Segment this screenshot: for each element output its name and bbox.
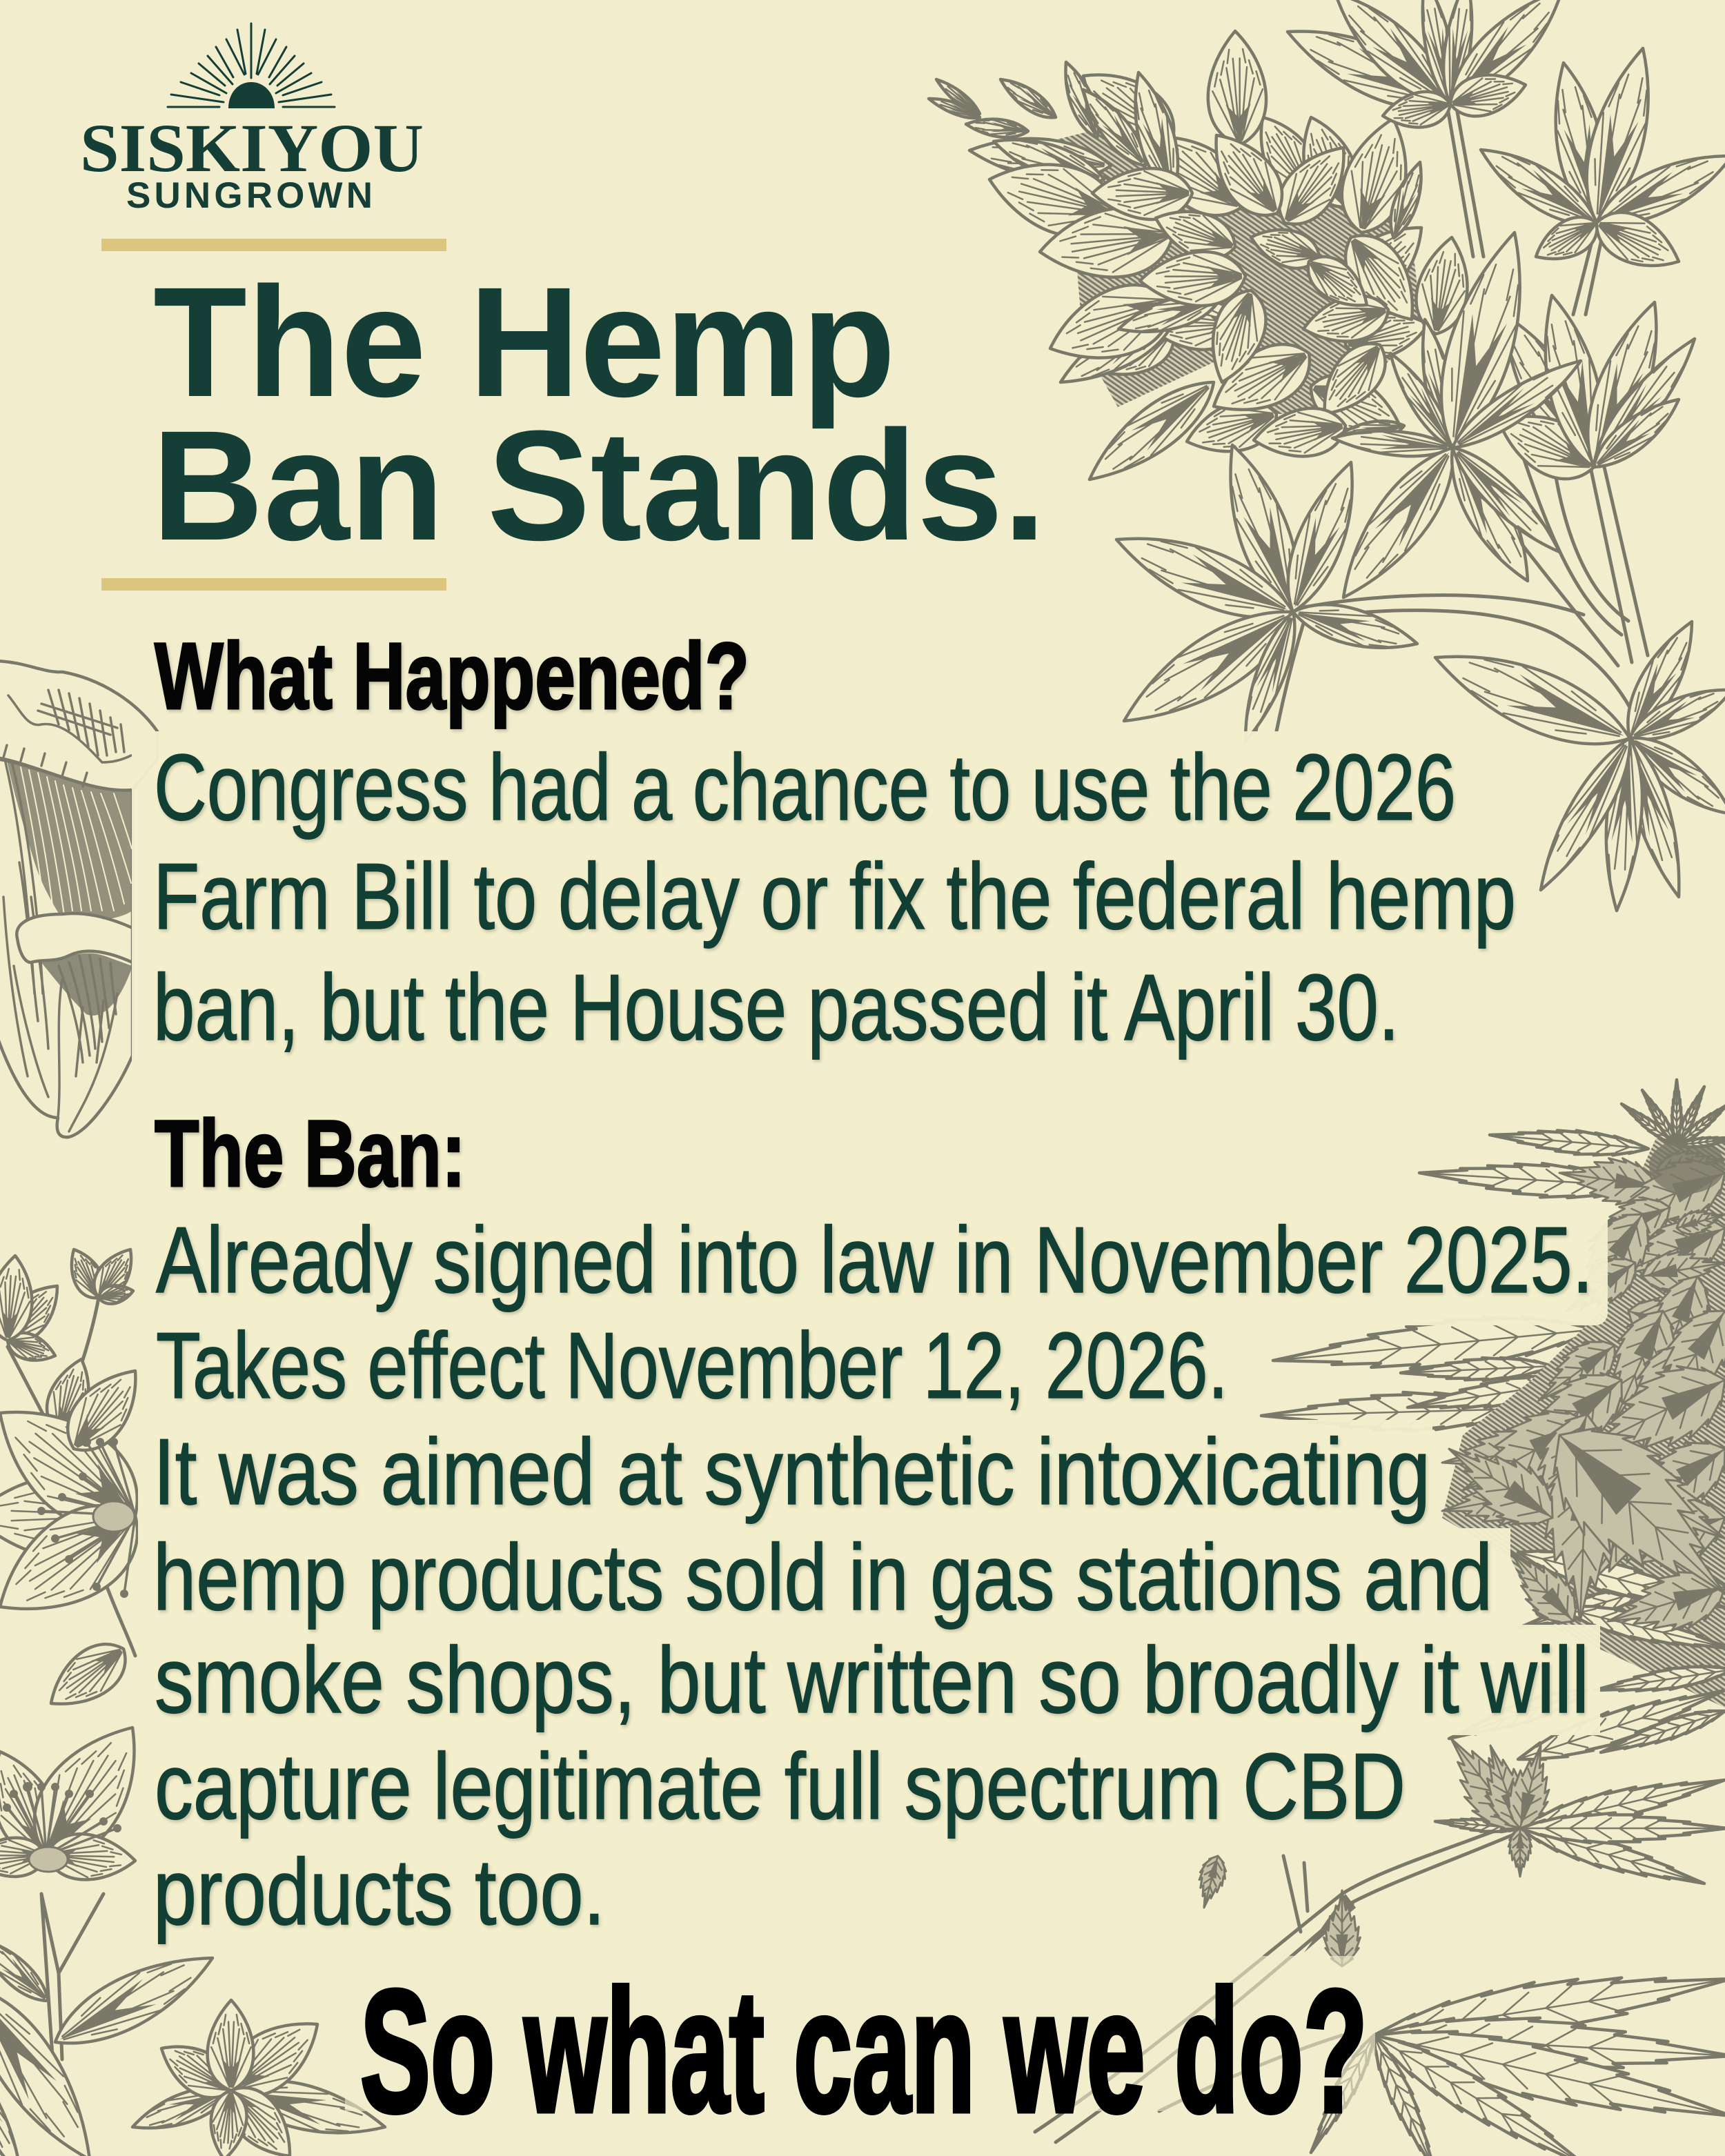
gold rule top (101, 239, 446, 251)
paragraph: what happened: ban, but the House passed it April 30. (153, 955, 1399, 1060)
large flower one (0, 1355, 161, 1642)
mid leaf whorl (1342, 1722, 1725, 1904)
paragraph: the ban (153, 1207, 1593, 1944)
title: Ban Stands. (152, 399, 1046, 573)
text background patches covering the illustrations (132, 731, 1608, 1956)
section: the ban (153, 1101, 1593, 1944)
hemp bud tone backing (1442, 1138, 1725, 1711)
paragraph: the ban: Takes effect November 12, 2026. (156, 1313, 1228, 1418)
small flower (0, 1241, 142, 1437)
heading: the ban: The Ban: (155, 1101, 466, 1207)
large flower two (0, 1705, 164, 1883)
title: The Hemp (153, 255, 896, 430)
stems of the lupine (1256, 104, 1648, 731)
illustration: mushroom, left edge (0, 661, 157, 1137)
logo: Siskiyou Sungrown (80, 23, 424, 216)
paragraph: the ban: capture legitimate full spectrum CBD (155, 1734, 1406, 1839)
leaf whorl: lower left (1106, 437, 1422, 746)
closing line backdrop (345, 1956, 1375, 2111)
hemp crown (1619, 1080, 1725, 1194)
leaf whorl: upper right (1470, 41, 1725, 281)
lower leaves (0, 1929, 224, 2156)
lower cap (17, 913, 132, 962)
stems (8, 1298, 135, 2059)
logo tagline: SUNGROWN (126, 175, 373, 216)
paragraph: the ban: It was aimed at synthetic intoxicating (153, 1419, 1430, 1524)
leaf whorl: middle right (1482, 290, 1707, 492)
spike backing (1035, 124, 1421, 414)
bottom flower (128, 2000, 391, 2156)
small hemp leaf (1192, 1852, 1230, 1911)
leaf whorl: top (1277, 0, 1577, 134)
heading: what happened: What Happened? (155, 624, 749, 729)
paragraph: the ban: products too. (153, 1839, 605, 1944)
large bottom hemp leaves (1302, 1952, 1725, 2156)
gold rule bottom (101, 578, 446, 591)
leaf (37, 1631, 138, 1723)
logo sun and rays (168, 23, 335, 108)
illustration: hemp plant, right side (1035, 1080, 1725, 2156)
logo wordmark: SISKIYOU (80, 110, 424, 186)
upper cap (0, 661, 157, 790)
illustration: lupine flower spike, top right (927, 0, 1725, 912)
leaf whorl: lower right (1423, 613, 1725, 912)
illustration: wildflowers, bottom left (0, 1241, 391, 2156)
leaf whorl: centre (1323, 224, 1589, 613)
paragraph: what happened (153, 735, 1516, 1060)
main stem and forks (1035, 1856, 1360, 2142)
section: what happened (153, 624, 1516, 1060)
title (152, 255, 1046, 573)
